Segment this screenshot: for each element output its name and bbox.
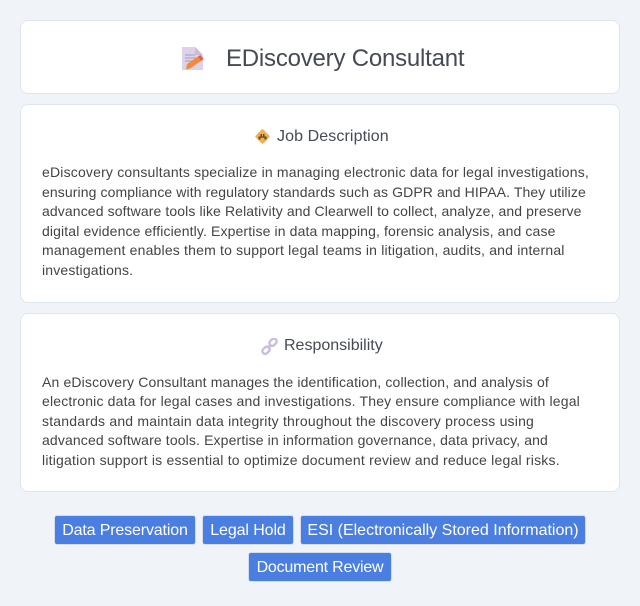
text block: job description: digital evidence efficiently. Expertise in data mapping, forensic analysis, and case <box>42 223 556 239</box>
text block: responsibility: An eDiscovery Consultant manages the identification, collection, and analysis of <box>42 374 549 390</box>
text block: job description: eDiscovery consultants specialize in managing electronic data for legal investigations, <box>42 164 589 180</box>
tag: ESI: ESI (Electronically Stored Information) <box>307 522 579 539</box>
tag: legal hold <box>202 515 294 545</box>
text block: responsibility: standards and maintain data integrity throughout the discovery process using <box>42 413 534 429</box>
text block: responsibility: advanced software tools. Expertise in information governance, data privacy, and <box>42 432 548 448</box>
text block: job description: investigations. <box>42 262 133 278</box>
text block: responsibility: electronic data for legal cases and investigations. They ensure compliance with legal <box>42 393 580 409</box>
text block: job description: advanced software tools like Relativity and Clearwell to collect, analyze, and preserve <box>42 203 582 219</box>
panel: job description <box>20 104 620 303</box>
tag: data preservation <box>54 515 196 545</box>
tag: document review <box>248 552 392 582</box>
text block: responsibility <box>42 374 580 468</box>
tag: ESI <box>300 515 586 545</box>
icon: job diamond <box>255 129 270 144</box>
text block: job description: management enables them to support legal teams in litigation, audits, and internal <box>42 242 565 258</box>
tag: data preservation: Data Preservation <box>62 522 188 539</box>
tag: document review: Document Review <box>257 559 383 576</box>
heading: job description: Job Description <box>277 128 389 145</box>
title: EDiscovery Consultant <box>226 45 464 72</box>
text block: responsibility: litigation support is essential to optimize document review and reduce legal risks. <box>42 452 560 468</box>
icon: document with pencil <box>182 47 204 70</box>
tag: legal hold: Legal Hold <box>210 522 286 539</box>
heading: responsibility: Responsibility <box>284 337 383 354</box>
text block: job description: ensuring compliance with regulatory standards such as GDPR and HIPAA. They utilize <box>42 184 586 200</box>
text block: job description <box>42 164 589 278</box>
panel: responsibility <box>20 313 620 492</box>
icon: chain link <box>261 338 278 355</box>
panel: title card <box>20 20 620 94</box>
